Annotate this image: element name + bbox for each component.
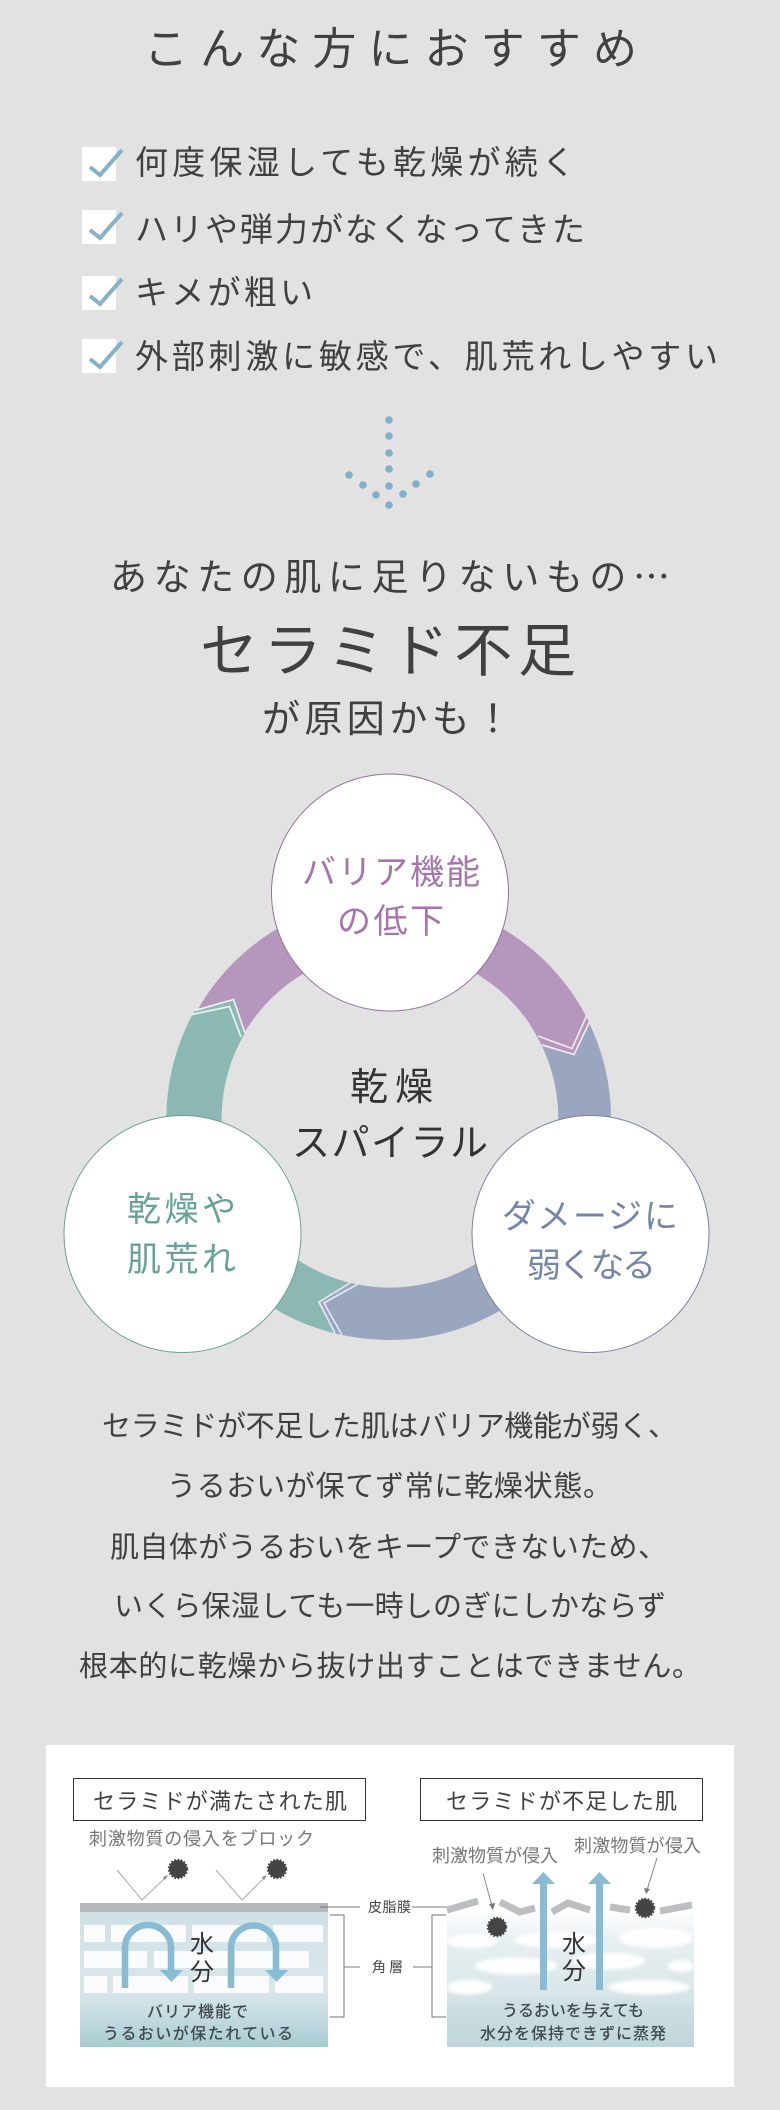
circle: dryness and rough skin: 肌荒れ — [127, 1241, 236, 1279]
panel: skin comparison — [46, 1745, 734, 2087]
circle: dryness and rough skin — [64, 1116, 301, 1352]
damaged skin layer — [446, 1858, 694, 2047]
item: sensitive skin: 外部刺激に敏感で、肌荒れしやすい — [135, 338, 718, 375]
chevron: bottom — [319, 1283, 358, 1335]
icon: dotted down arrow — [345, 416, 434, 509]
label: water — [562, 1931, 586, 1985]
explanation paragraph — [79, 1410, 701, 1683]
label: stratum corneum — [330, 1915, 446, 2017]
caption: moisture evaporates — [480, 2002, 666, 2043]
item: firmness lost: ハリや弾力がなくなってきた — [135, 211, 585, 248]
title: こんな方におすすめ — [144, 25, 637, 74]
explanation paragraph: うるおいが保てず常に乾燥状態。 — [167, 1470, 612, 1503]
label: sebum film — [320, 1899, 450, 1915]
label: blocks irritants: 刺激物質の侵入をブロック — [89, 1828, 314, 1849]
label: irritants enter left: 刺激物質が侵入 — [432, 1846, 558, 1866]
heading: may be the cause: が原因かも！ — [262, 699, 512, 741]
item: dryness continues: 何度保湿しても乾燥が続く — [135, 144, 575, 181]
arrow: retained water 2 — [231, 1926, 288, 1988]
heading: what your skin lacks: あなたの肌に足りないもの… — [110, 547, 670, 601]
explanation paragraph: セラミドが不足した肌はバリア機能が弱く、 — [102, 1410, 677, 1443]
chevron: left — [192, 1000, 245, 1037]
circle: vulnerable to damage — [472, 1116, 709, 1352]
caption: barrier keeps moisture — [103, 2003, 293, 2043]
label: water: 水 — [562, 1931, 586, 1958]
heading: ceramide-filled skin — [74, 1778, 366, 1820]
heading: ceramide-deficient skin — [420, 1778, 702, 1820]
circle: vulnerable to damage: 弱くなる — [527, 1247, 656, 1285]
circle: reduced barrier: の低下 — [337, 903, 444, 941]
label: water: 分 — [190, 1959, 214, 1986]
label: spiral center: スパイラル — [292, 1123, 488, 1165]
checklist — [82, 144, 718, 375]
caption: moisture evaporates: うるおいを与えても — [502, 2002, 644, 2020]
caption: barrier keeps moisture: うるおいが保たれている — [103, 2024, 293, 2043]
label: irritants enter right: 刺激物質が侵入 — [574, 1836, 701, 1856]
circle: dryness and rough skin: 乾燥や — [127, 1191, 236, 1229]
heading: ceramide-filled skin: セラミドが満たされた肌 — [93, 1789, 347, 1814]
label: sebum film: 皮脂膜 — [368, 1899, 411, 1915]
irritant particles entering — [483, 1858, 657, 1936]
ring: green segment — [166, 1000, 375, 1339]
explanation paragraph: いくら保湿しても一時しのぎにしかならず — [114, 1590, 666, 1623]
diagram: dryness spiral — [64, 774, 709, 1352]
circle: reduced barrier — [272, 774, 508, 1011]
arrow: evaporating water 1 — [532, 1872, 555, 1990]
circle: reduced barrier: バリア機能 — [302, 854, 480, 892]
irritant particles blocked — [117, 1860, 286, 1900]
broken sebum film — [447, 1901, 692, 1912]
ring: purple left segment — [187, 898, 390, 1051]
caption: moisture evaporates: 水分を保持できずに蒸発 — [480, 2025, 666, 2043]
item: rough texture: キメが粗い — [135, 274, 313, 311]
explanation paragraph: 肌自体がうるおいをキープできないため、 — [110, 1531, 667, 1564]
ring: blue segment — [319, 1006, 611, 1340]
label: water — [190, 1931, 214, 1986]
circle: vulnerable to damage: ダメージに — [502, 1198, 678, 1236]
label: stratum corneum: 角層 — [372, 1959, 403, 1975]
arrow: retained water 1 — [125, 1925, 183, 1988]
label: water: 分 — [562, 1958, 586, 1985]
heading: ceramide-deficient skin: セラミドが不足した肌 — [446, 1789, 677, 1814]
label: water: 水 — [190, 1931, 214, 1958]
healthy skin layer — [80, 1903, 328, 2047]
label: spiral center: 乾燥 — [350, 1067, 433, 1109]
explanation paragraph: 根本的に乾燥から抜け出すことはできません。 — [79, 1650, 701, 1683]
chevron: right — [538, 1015, 590, 1054]
ring: purple right segment — [390, 898, 589, 1054]
label: spiral center — [292, 1067, 488, 1165]
heading: ceramide deficiency: セラミド不足 — [200, 619, 576, 684]
arrow: evaporating water 2 — [588, 1872, 611, 1990]
caption: barrier keeps moisture: バリア機能で — [147, 2003, 248, 2021]
